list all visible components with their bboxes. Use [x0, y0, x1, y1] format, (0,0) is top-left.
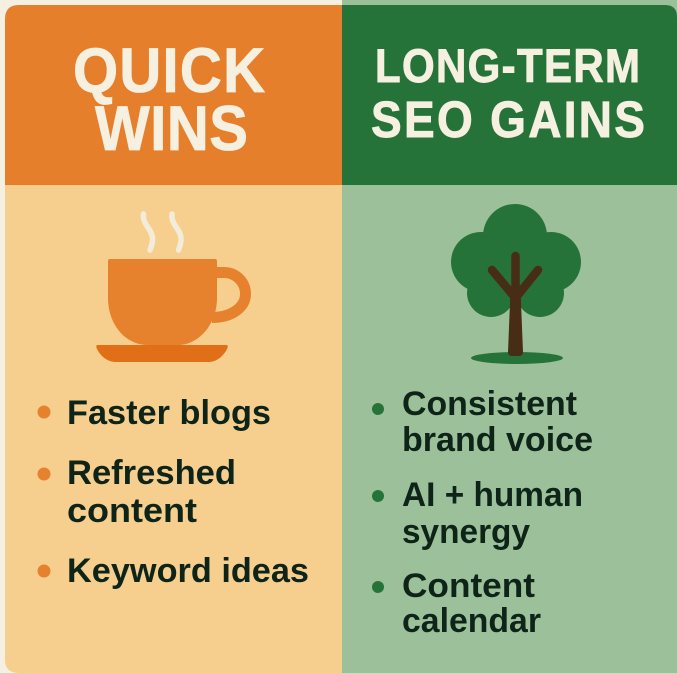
panel: long-term seo gains — [342, 0, 677, 673]
item: refreshed content: content — [67, 492, 197, 530]
item: ai + human synergy: synergy — [402, 513, 530, 551]
item: faster blogs: Faster blogs — [67, 394, 271, 432]
item: content calendar: Content — [402, 567, 535, 605]
heading: long-term seo gains — [371, 41, 645, 149]
list: quick wins items — [38, 394, 309, 590]
item: consistent brand voice: Consistent — [402, 385, 577, 423]
list: long-term items — [372, 385, 593, 640]
item: content calendar — [372, 567, 541, 640]
panel: quick wins — [5, 5, 342, 673]
icon: coffee cup with saucer — [96, 214, 246, 362]
item: refreshed content: Refreshed — [67, 454, 236, 492]
heading: quick wins: WINS — [95, 93, 248, 163]
item: consistent brand voice — [372, 385, 593, 459]
item: content calendar: calendar — [402, 602, 541, 640]
item: ai + human synergy — [372, 476, 583, 551]
item: consistent brand voice: brand voice — [402, 421, 593, 459]
header: long-term seo gains — [342, 5, 677, 185]
heading: long-term seo gains: SEO GAINS — [371, 92, 645, 149]
heading: quick wins: QUICK — [73, 35, 265, 105]
header: quick wins — [5, 5, 342, 185]
item: ai + human synergy: AI + human — [402, 476, 583, 514]
icon: tree — [451, 204, 581, 364]
item: keyword ideas: Keyword ideas — [67, 552, 309, 590]
heading: quick wins — [73, 35, 265, 163]
heading: long-term seo gains: LONG-TERM — [375, 41, 640, 93]
item: refreshed content — [38, 454, 236, 530]
